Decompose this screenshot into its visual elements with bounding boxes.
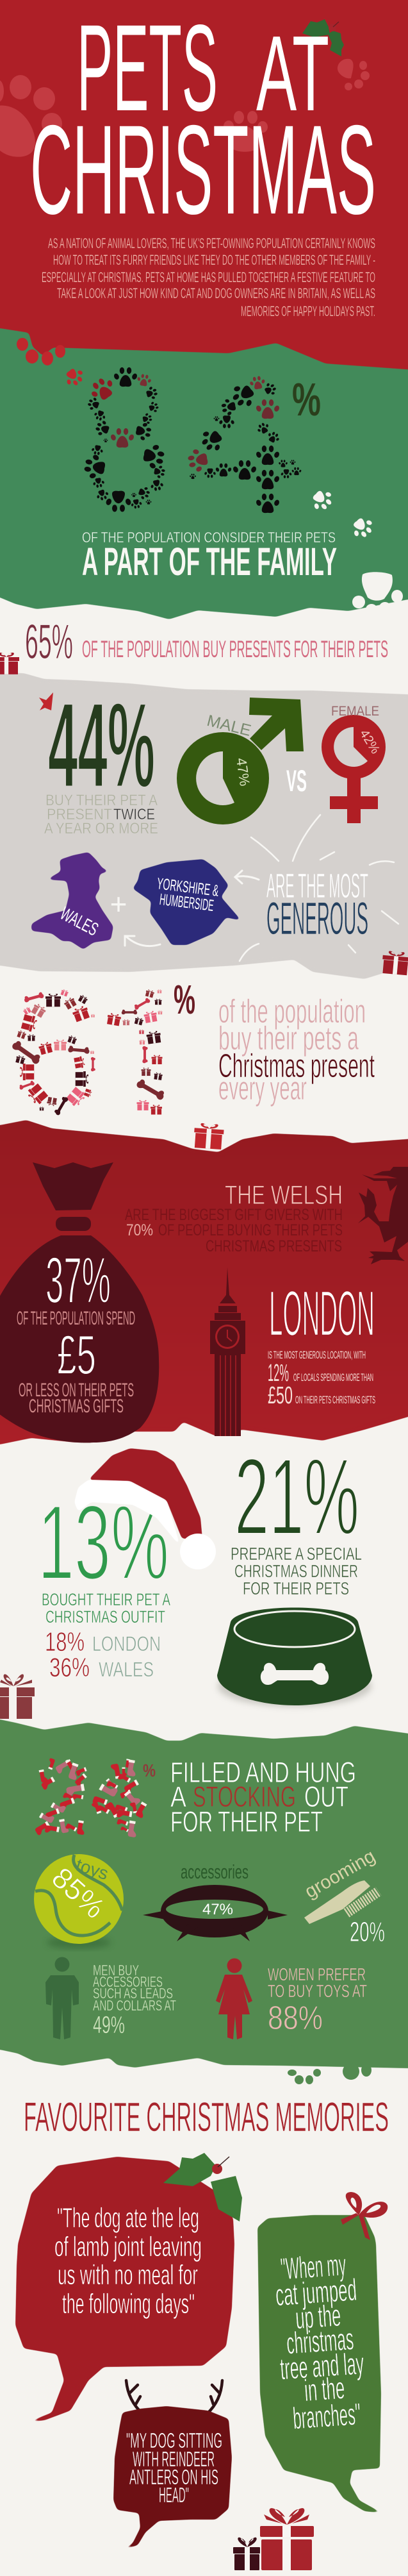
text: bought their pet a christmas outfit: BOUGHT THEIR PET A <box>42 1590 170 1609</box>
callout: green speech bubble cat in tree <box>257 2192 397 2514</box>
text: buy their pet a present twice: TWICE <box>113 806 155 823</box>
panel: dark red spending stats: OR LESS ON THEIR PETS <box>19 1380 134 1401</box>
text: the welsh <box>125 1180 343 1255</box>
icon: white paws <box>308 486 403 614</box>
text: regional outfit stats: 36% <box>49 1652 90 1682</box>
title <box>30 0 376 240</box>
icon: holly on bubble <box>163 2153 242 2221</box>
icon: tennis ball toys 85 percent <box>34 1854 124 1949</box>
text: quote reindeer antlers: WITH REINDEER <box>133 2447 215 2471</box>
panel: 61 percent christmas present <box>11 976 375 1116</box>
text: filled and hung a stocking: STOCKING <box>193 1780 296 1813</box>
text: men buy accessories: SUCH AS LEADS <box>93 1985 173 2002</box>
icon: gift right edge <box>381 950 408 975</box>
text: of the population consider their pets: OF THE POPULATION CONSIDER THEIR PETS <box>82 529 336 546</box>
text: regional outfit stats: LONDON <box>92 1632 161 1655</box>
text: prepare a special christmas dinner: PREPARE A SPECIAL <box>231 1544 362 1564</box>
text: quote cat in tree <box>274 2248 365 2436</box>
text: men buy accessories: MEN BUY <box>93 1962 139 1978</box>
text: quote cat in tree: in the <box>303 2371 346 2408</box>
text: accessories: accessories <box>181 1861 249 1883</box>
icon: red bow <box>341 2192 388 2240</box>
text: quote leg of lamb: of lamb joint leaving <box>54 2231 202 2262</box>
text: london most generous location <box>268 1278 375 1409</box>
title: AT <box>256 14 329 133</box>
chart: number 6 made of gifts <box>11 989 95 1116</box>
text: plus sign: + <box>110 887 127 921</box>
panel: intro red header <box>0 0 408 385</box>
text: of the population buy their pets a christmas present every year: every year <box>218 1070 307 1107</box>
icon: small red paw <box>61 364 87 390</box>
icon: tennis ball toys 85 percent: 85% <box>45 1861 111 1925</box>
text: filled and hung a stocking: FOR THEIR PET <box>170 1805 323 1838</box>
chart: number 1 made of gifts <box>106 989 166 1114</box>
text: women prefer toys <box>268 1964 367 2037</box>
panel: dark red spending stats <box>0 1120 408 1444</box>
icon: spiked collar 47 percent: 47% <box>202 1901 233 1918</box>
text: vs: VS <box>286 764 307 798</box>
text: prepare a special christmas dinner <box>231 1544 362 1598</box>
chart: number 8 made of paws <box>83 367 166 512</box>
icon: small dark gift <box>233 2538 260 2570</box>
title: PETS <box>77 0 218 137</box>
icon: female symbol pie chart 42 percent <box>322 704 386 823</box>
stat: 37 percent spend 5 pounds: 37% <box>45 1244 111 1317</box>
icon: antlers <box>126 2380 222 2414</box>
text: of the population buy their pets a christmas present every year <box>218 993 375 1107</box>
icon: comb <box>304 1880 379 1924</box>
text: quote reindeer antlers: HEAD" <box>159 2483 189 2507</box>
icon: holly on title <box>302 19 344 56</box>
percent sign: % <box>292 374 321 426</box>
icon: burst strokes <box>240 815 398 961</box>
icon: tennis ball toys 85 percent: toys <box>74 1855 111 1884</box>
icon: gift on edge <box>193 1123 224 1150</box>
stat: 44 percent <box>39 678 158 837</box>
icon: big ben <box>210 1267 245 1436</box>
icon: man figure <box>45 1957 79 2039</box>
panel: christmas outfit and dinner <box>0 1436 372 1719</box>
icon: welsh dragon <box>358 1167 408 1264</box>
stat: 37 percent spend 5 pounds: CHRISTMAS GIFTS <box>29 1396 124 1417</box>
text: men buy accessories <box>93 1962 176 2039</box>
text: prepare a special christmas dinner: FOR THEIR PETS <box>243 1578 349 1598</box>
text: bought their pet a christmas outfit: CHRISTMAS OUTFIT <box>45 1607 165 1627</box>
panel: dark red spending stats: OF THE POPULATION SPEND <box>17 1308 135 1329</box>
icon: yorkshire map <box>133 859 241 945</box>
icon: dog bowl <box>217 1608 372 1707</box>
icon: yorkshire map: HUMBERSIDE <box>158 891 215 915</box>
icon: male symbol pie chart 47 percent: MALE <box>205 712 253 740</box>
text: quote leg of lamb: the following days" <box>62 2288 195 2320</box>
icon: red ribbon on 44 <box>39 692 53 710</box>
text: filled and hung a stocking <box>170 1756 356 1838</box>
icon: wales map: WALES <box>57 903 101 941</box>
text: the welsh: CHRISTMAS PRESENTS <box>206 1237 342 1255</box>
text: the welsh: 70% <box>126 1221 153 1239</box>
text: quote leg of lamb: us with no meal for <box>58 2259 198 2291</box>
text: the welsh: THE WELSH <box>225 1180 343 1210</box>
arrow: to wales <box>125 936 160 946</box>
icon: female symbol pie chart 42 percent: FEMALE <box>331 704 379 719</box>
text: regional outfit stats: WALES <box>99 1658 154 1681</box>
text: london most generous location: £50 <box>268 1382 293 1409</box>
text: men buy accessories: AND COLLARS AT <box>93 1997 176 2014</box>
icon: big red gift <box>260 2508 314 2570</box>
icon: money sack <box>0 1162 159 1443</box>
text: quote reindeer antlers <box>126 2429 222 2507</box>
percent sign: % <box>143 1761 156 1780</box>
icon: male symbol pie chart 47 percent <box>177 698 304 824</box>
stat: 37 percent spend 5 pounds <box>17 1244 135 1417</box>
callout: dark red speech bubble reindeer antlers <box>113 2380 232 2551</box>
percent sign: % <box>174 976 195 1023</box>
text: women prefer toys: 88% <box>268 2000 323 2037</box>
heading: 65 percent buy presents: 65% <box>25 615 73 669</box>
stat: 13 percent: 13% <box>38 1484 169 1602</box>
icon: gift <box>0 1674 35 1719</box>
text: filled and hung a stocking: A <box>170 1780 186 1813</box>
chart: number 4 made of paws <box>186 375 302 513</box>
icon: spiked collar 47 percent <box>143 1885 288 1941</box>
icon: female symbol pie chart 42 percent: 42% <box>357 727 382 757</box>
chart: number 2 made of stockings <box>34 1758 88 1836</box>
icon: red paw toes from edge <box>17 338 65 365</box>
panel: 84 percent part of the family <box>0 328 408 619</box>
text: grooming: grooming <box>302 1846 379 1902</box>
text: are the most generous <box>266 867 368 944</box>
heading: 65 percent buy presents <box>25 615 388 669</box>
icon: gift left edge <box>0 653 19 674</box>
text: 20 percent: 20% <box>350 1916 385 1948</box>
text: buy their pet a present twice: BUY THEIR PET A <box>45 792 158 809</box>
text: men buy accessories: 49% <box>93 2012 125 2039</box>
icon: middle background paw <box>224 111 268 152</box>
text: buy their pet a present twice: A YEAR OR MORE <box>44 820 158 837</box>
icon: top right background paw <box>338 59 370 90</box>
icon: yorkshire map: YORKSHIRE & <box>156 874 220 900</box>
text: buy their pet a present twice: PRESENT <box>47 806 112 823</box>
text: quote leg of lamb: "The dog ate the leg <box>57 2202 199 2234</box>
icon: large background paw <box>0 75 62 157</box>
text: regional outfit stats: 18% <box>45 1627 85 1657</box>
text: bought their pet a christmas outfit <box>42 1590 170 1627</box>
arrow: to yorkshire <box>235 871 259 883</box>
text: quote cat in tree: up the <box>294 2299 342 2336</box>
text: quote reindeer antlers: ANTLERS ON HIS <box>129 2465 218 2489</box>
icon: santa hat <box>74 1448 216 1569</box>
text: regional outfit stats <box>45 1627 161 1682</box>
text: men buy accessories: ACCESSORIES <box>93 1973 163 1990</box>
text: quote reindeer antlers: "MY DOG SITTING <box>126 2429 222 2452</box>
panel: grey gift stats: 44% <box>48 678 155 812</box>
icon: male symbol pie chart 47 percent: 47% <box>233 757 253 787</box>
text: filled and hung a stocking: OUT <box>304 1780 348 1813</box>
intro paragraph <box>42 235 375 319</box>
icon: wales map <box>31 852 113 949</box>
text: the welsh: OF PEOPLE BUYING THEIR PETS <box>158 1221 343 1239</box>
text: london most generous location: 12% <box>268 1360 289 1387</box>
text: buy their pet a present twice <box>44 792 158 837</box>
panel: green stocking stats <box>0 1718 408 2084</box>
chart: number 4 made of stockings <box>91 1759 149 1837</box>
stat: 37 percent spend 5 pounds: £5 <box>57 1325 96 1386</box>
callout: red speech bubble leg of lamb <box>15 2153 242 2423</box>
text: quote leg of lamb <box>54 2202 202 2320</box>
icon: woman figure <box>216 1958 252 2039</box>
panel: grey gift stats <box>0 653 408 979</box>
icon: green paw toes at edge <box>288 2063 371 2084</box>
